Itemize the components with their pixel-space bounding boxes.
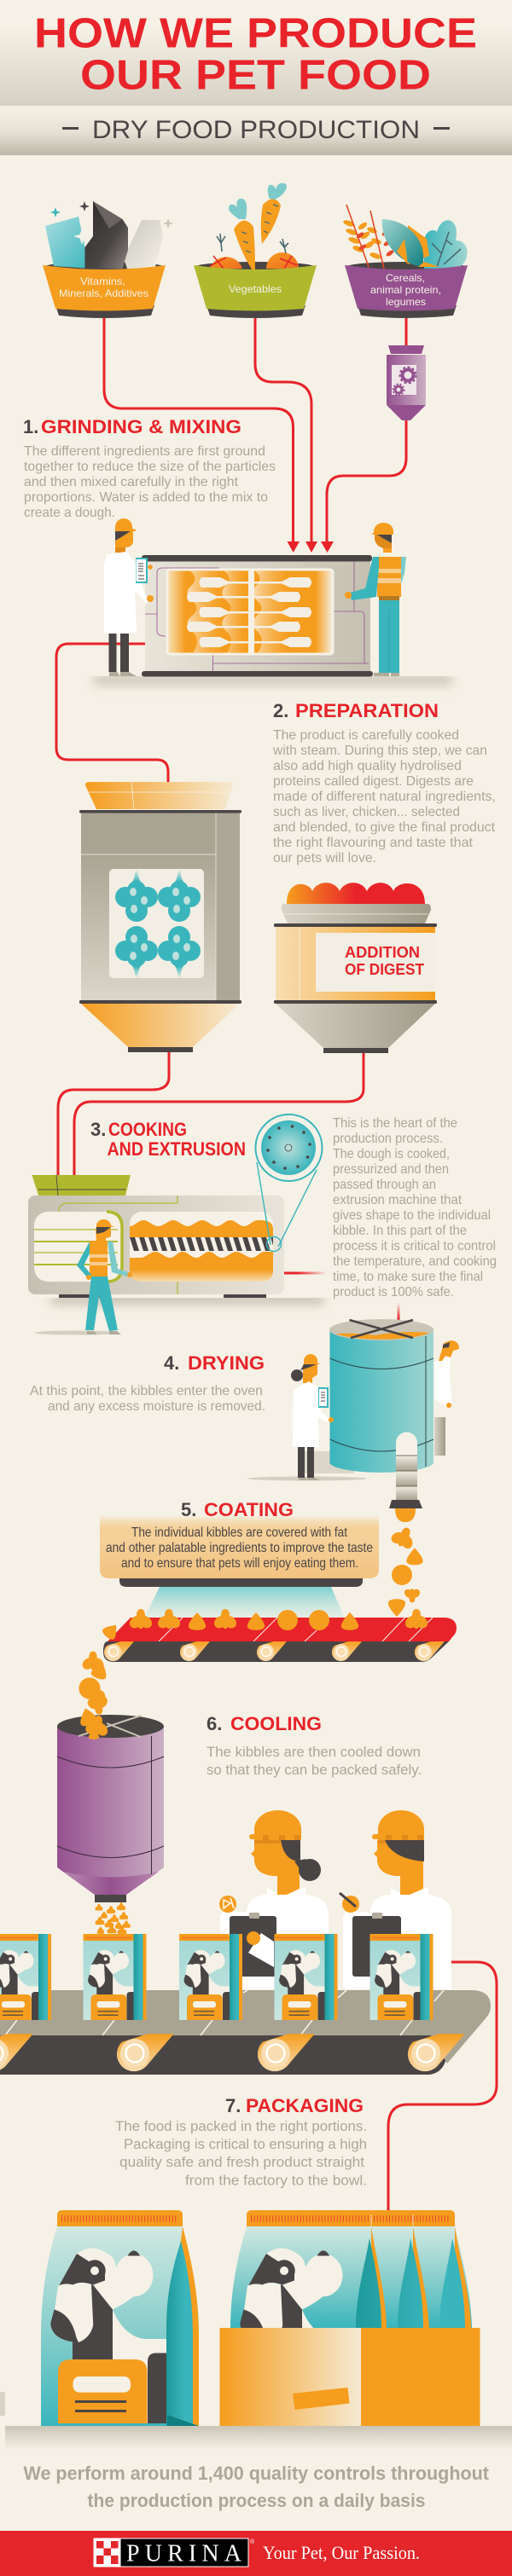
bag top seal <box>247 2210 455 2226</box>
step 2 text: made of different natural ingredients, <box>273 790 496 804</box>
bowl label: animal protein, <box>370 284 441 296</box>
worker with ponytail and clipboard <box>219 1810 329 1989</box>
icon: gears <box>392 365 416 396</box>
kibbles on belt <box>130 1609 428 1630</box>
scientist with clipboard <box>291 1354 334 1480</box>
bag top seal <box>57 2210 183 2226</box>
drying drum with workers <box>247 1319 459 1508</box>
step 4 text: and any excess moisture is removed. <box>48 1399 265 1414</box>
step 7 text: Packaging is critical to ensuring a high <box>124 2136 367 2152</box>
addition of digest hopper <box>274 883 437 1053</box>
step 3 text: production process. <box>333 1132 443 1146</box>
step 2 heading: 2. <box>273 700 288 721</box>
step 6 text: The kibbles are then cooled down <box>207 1744 421 1760</box>
step 2 text: and blended, to give the final product <box>273 820 496 835</box>
cooling window <box>34 1212 122 1282</box>
step 5 text <box>106 1525 373 1571</box>
die plate callout <box>256 1114 323 1252</box>
icon: wheat, fish, leaves <box>342 205 468 269</box>
bowl label: legumes <box>386 296 426 308</box>
step 3 text: extrusion machine that <box>333 1193 463 1207</box>
step 4 heading: DRYING <box>188 1352 265 1374</box>
step 4 text: At this point, the kibbles enter the oven <box>30 1384 263 1398</box>
step 1 text: and then mixed carefully in the right <box>24 475 239 489</box>
scientist behind drum <box>434 1340 459 1456</box>
step 2 text: The product is carefully cooked <box>273 728 459 743</box>
step 1 text <box>24 444 276 520</box>
floor shadow under extruder <box>51 1295 324 1304</box>
clipboard <box>230 1913 276 1977</box>
step 7 text <box>115 2118 367 2188</box>
step 1 text: together to reduce the size of the particles <box>24 460 276 474</box>
chute and nozzle <box>389 1456 422 1508</box>
extrusion machine <box>28 1114 323 1298</box>
cardboard box <box>220 2328 480 2426</box>
step 5 text: and other palatable ingredients to improve the taste <box>106 1541 373 1555</box>
step 2 text: with steam. During this step, we can <box>272 744 487 758</box>
steam cooker hopper <box>79 782 241 1052</box>
step 3 text: time, to make sure the final <box>333 1270 483 1284</box>
step 3 heading: COOKING <box>108 1119 187 1140</box>
kibbles falling from silo <box>95 1902 131 1935</box>
step 1 heading: GRINDING & MIXING <box>41 416 241 437</box>
red line leaving mixer <box>56 644 168 782</box>
worker with pen and clipboard <box>340 1810 451 1989</box>
large pet food bag in box <box>220 2210 480 2426</box>
red fading line segments <box>284 1272 399 1335</box>
purina logo: PURINA <box>126 2541 242 2567</box>
mixing machine <box>142 555 373 677</box>
step 1 heading: 1. <box>23 416 38 437</box>
step 5 text: and to ensure that pets will enjoy eating them. <box>121 1556 358 1571</box>
title <box>34 10 477 99</box>
step 3 text: The dough is cooked, <box>333 1147 450 1161</box>
bowl label: Vegetables <box>229 283 282 295</box>
step 5 heading: 5. <box>181 1499 196 1520</box>
step 3 text <box>333 1116 497 1300</box>
bowl label <box>59 275 148 299</box>
floor shadow <box>0 2392 512 2450</box>
step 3 text: process it is critical to control <box>333 1239 496 1253</box>
step 7 text: quality safe and fresh product straight <box>119 2154 364 2170</box>
step 7 heading: PACKAGING <box>246 2095 364 2116</box>
step 2 text <box>272 728 496 865</box>
step 5 text: The individual kibbles are covered with fat <box>131 1525 347 1540</box>
worker in high-visibility vest <box>345 523 406 676</box>
falling kibbles from dryer <box>388 1508 423 1617</box>
bowl label: Cereals, <box>386 272 425 284</box>
red line to packaging <box>388 1962 497 2210</box>
step 2 text: also add high quality hydrolised <box>273 759 462 773</box>
bowl: cereals, animal protein, legumes <box>342 205 468 318</box>
step 3 text: pressurized and then <box>333 1162 449 1177</box>
digest label: ADDITION <box>345 944 420 961</box>
subtitle band: dry food production: DRY FOOD PRODUCTION <box>92 116 420 144</box>
steam window <box>109 869 204 978</box>
step 4 heading: 4. <box>164 1352 179 1374</box>
step 3 heading <box>90 1119 246 1160</box>
coating spray <box>143 1587 346 1620</box>
digest label <box>345 944 424 978</box>
title: OUR PET FOOD <box>80 53 431 99</box>
digest label: OF DIGEST <box>345 961 424 978</box>
clipboard <box>136 558 148 583</box>
header: title band <box>0 0 512 106</box>
step 2 text: proteins called digest. Digests are <box>273 774 474 789</box>
clipboard <box>352 1913 401 1977</box>
floor shadow under mixer <box>94 674 452 686</box>
step 6 text: so that they can be packed safely. <box>207 1762 422 1778</box>
icon: crystals <box>45 201 173 269</box>
coating conveyor belt <box>103 1609 457 1662</box>
step 3 text: product is 100% safe. <box>333 1285 454 1300</box>
purple grinder hopper with gears <box>387 345 426 420</box>
step 2 text: our pets will love. <box>273 851 376 865</box>
purina logo <box>94 2538 255 2567</box>
step 3 text: gives shape to the individual <box>333 1208 491 1223</box>
worker at extruder <box>34 1219 132 1335</box>
step 5 heading: COATING <box>204 1499 294 1520</box>
pet food packs on conveyor <box>0 1934 433 2020</box>
title: HOW WE PRODUCE <box>34 10 477 56</box>
step 3 text: passed through an <box>333 1178 436 1192</box>
tagline: Your Pet, Our Passion. <box>263 2542 420 2563</box>
red flow lines from bowls to mixer <box>104 318 406 543</box>
arrowheads into mixer <box>287 541 334 553</box>
subtitle band: dry food production <box>0 106 512 155</box>
step 1 text: proportions. Water is added to the mix to <box>24 490 268 505</box>
bowl: vegetables <box>194 183 317 318</box>
kibbles falling into cooler <box>79 1620 122 1716</box>
closing statement: the production process on a daily basis <box>87 2490 425 2511</box>
bowl label: Minerals, Additives <box>59 287 148 299</box>
bowl label <box>370 272 441 308</box>
scientist with clipboard <box>104 518 154 676</box>
step 7 text: from the factory to the bowl. <box>185 2173 367 2188</box>
closing statement <box>24 2463 490 2511</box>
step 3 heading: 3. <box>90 1119 106 1140</box>
bowl: vitamins, minerals, additives <box>43 201 173 318</box>
step 7 heading: 7. <box>225 2095 241 2116</box>
step 6 text <box>207 1744 422 1778</box>
red lines into extruder <box>58 1052 364 1175</box>
icon: vegetables <box>210 183 299 269</box>
step 1 text: create a dough. <box>24 506 115 520</box>
bowl label: Vitamins, <box>80 275 125 287</box>
extruder chamber and screw <box>130 1212 273 1282</box>
step 2 text: the right flavouring and taste that <box>273 836 474 850</box>
step 2 heading: PREPARATION <box>295 700 439 721</box>
step 3 text: kibble. In this part of the <box>333 1224 467 1238</box>
step 6 heading: COOLING <box>230 1713 322 1734</box>
cooling silo <box>57 1706 164 1935</box>
large pet food bag <box>41 2210 199 2426</box>
packaging conveyor <box>0 1990 491 2075</box>
step 4 text <box>30 1384 265 1414</box>
step 2 text: such as liver, chicken... selected <box>273 805 460 819</box>
closing statement: We perform around 1,400 quality controls throughout <box>24 2463 490 2484</box>
step 6 heading: 6. <box>207 1713 222 1734</box>
footer band <box>0 2531 512 2576</box>
mixer panel with paddles <box>167 570 333 654</box>
step 1 text: The different ingredients are first ground <box>24 444 265 459</box>
step 3 text: the temperature, and cooking <box>333 1254 497 1269</box>
step 3 text: This is the heart of the <box>333 1116 457 1131</box>
step 3 heading: AND EXTRUSION <box>108 1138 246 1160</box>
coating machine panel <box>100 1515 379 1587</box>
step 7 text: The food is packed in the right portions. <box>115 2118 367 2134</box>
purina logo: ® <box>250 2538 255 2545</box>
